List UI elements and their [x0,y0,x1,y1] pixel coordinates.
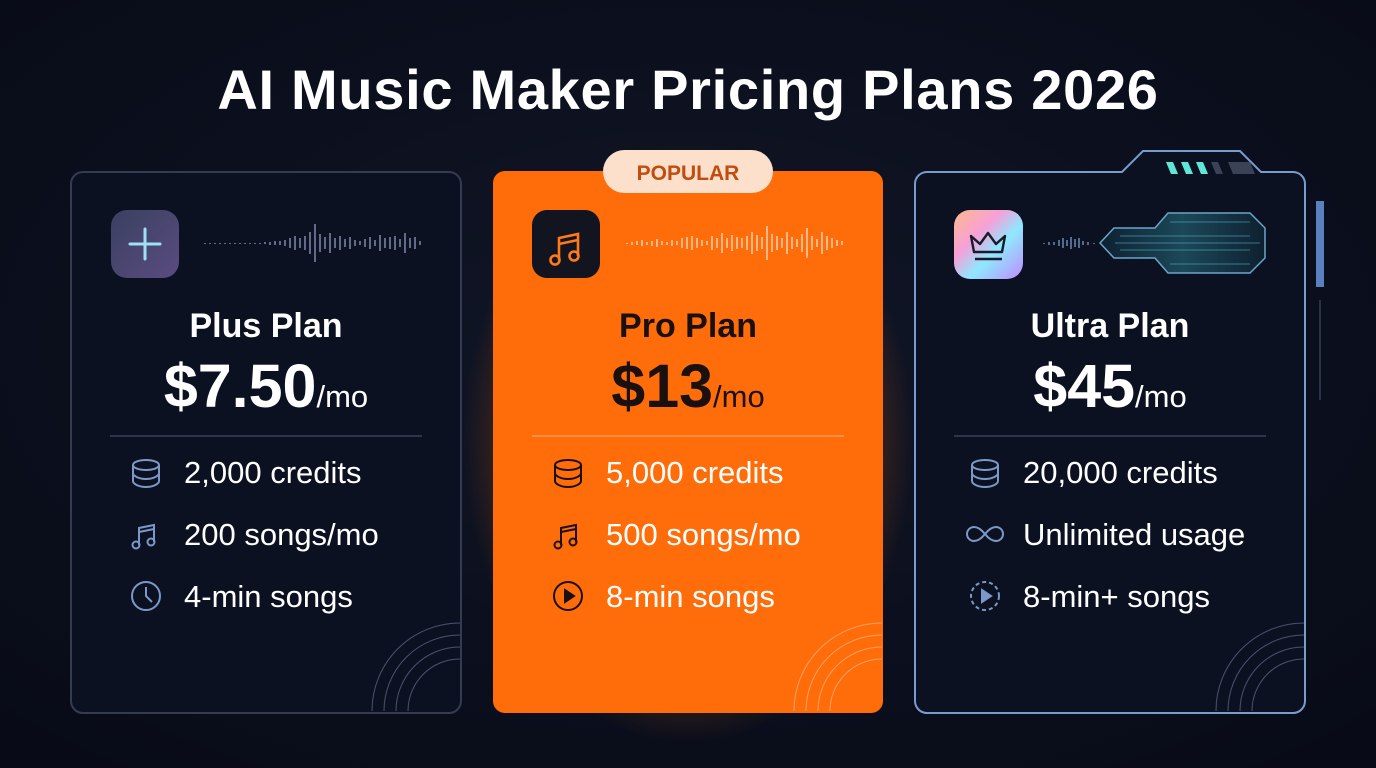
feature list: ultra: 20,000 credits [1023,455,1218,490]
badge: popular [603,150,773,193]
feature list: plus [132,455,379,614]
waveform: ultra [1044,237,1094,249]
heading: plus plan: Plus Plan [189,307,343,345]
title: AI Music Maker Pricing Plans 2026 [217,58,1159,121]
pill graphic [1100,213,1265,273]
feature list: pro [554,455,801,614]
feature list: ultra [967,455,1245,614]
feature list: plus: 4-min songs [184,579,353,614]
panel: pro plan [463,142,913,742]
price: ultra: $45/mo [1033,352,1187,420]
waveform: plus [205,224,420,262]
feature list: plus: 200 songs/mo [184,517,379,552]
price: plus: $7.50/mo [164,352,368,420]
feature list: ultra: 8-min+ songs [1023,579,1210,614]
feature list: plus: 2,000 credits [184,455,362,490]
icon: plus [111,210,179,278]
feature list: pro: 5,000 credits [606,455,784,490]
badge: popular: POPULAR [637,162,739,185]
panel: ultra plan [915,151,1324,713]
feature list: pro: 8-min songs [606,579,775,614]
heading: ultra plan: Ultra Plan [1031,307,1189,345]
status stripes [1166,162,1255,174]
feature list: pro: 500 songs/mo [606,517,801,552]
price: pro: $13/mo [611,352,765,420]
panel: plus plan [71,172,461,713]
icon: crown [954,210,1023,279]
feature list: ultra: Unlimited usage [1023,517,1245,552]
waveform: pro [627,226,842,260]
icon: music note [532,210,600,278]
heading: pro plan: Pro Plan [619,307,757,345]
